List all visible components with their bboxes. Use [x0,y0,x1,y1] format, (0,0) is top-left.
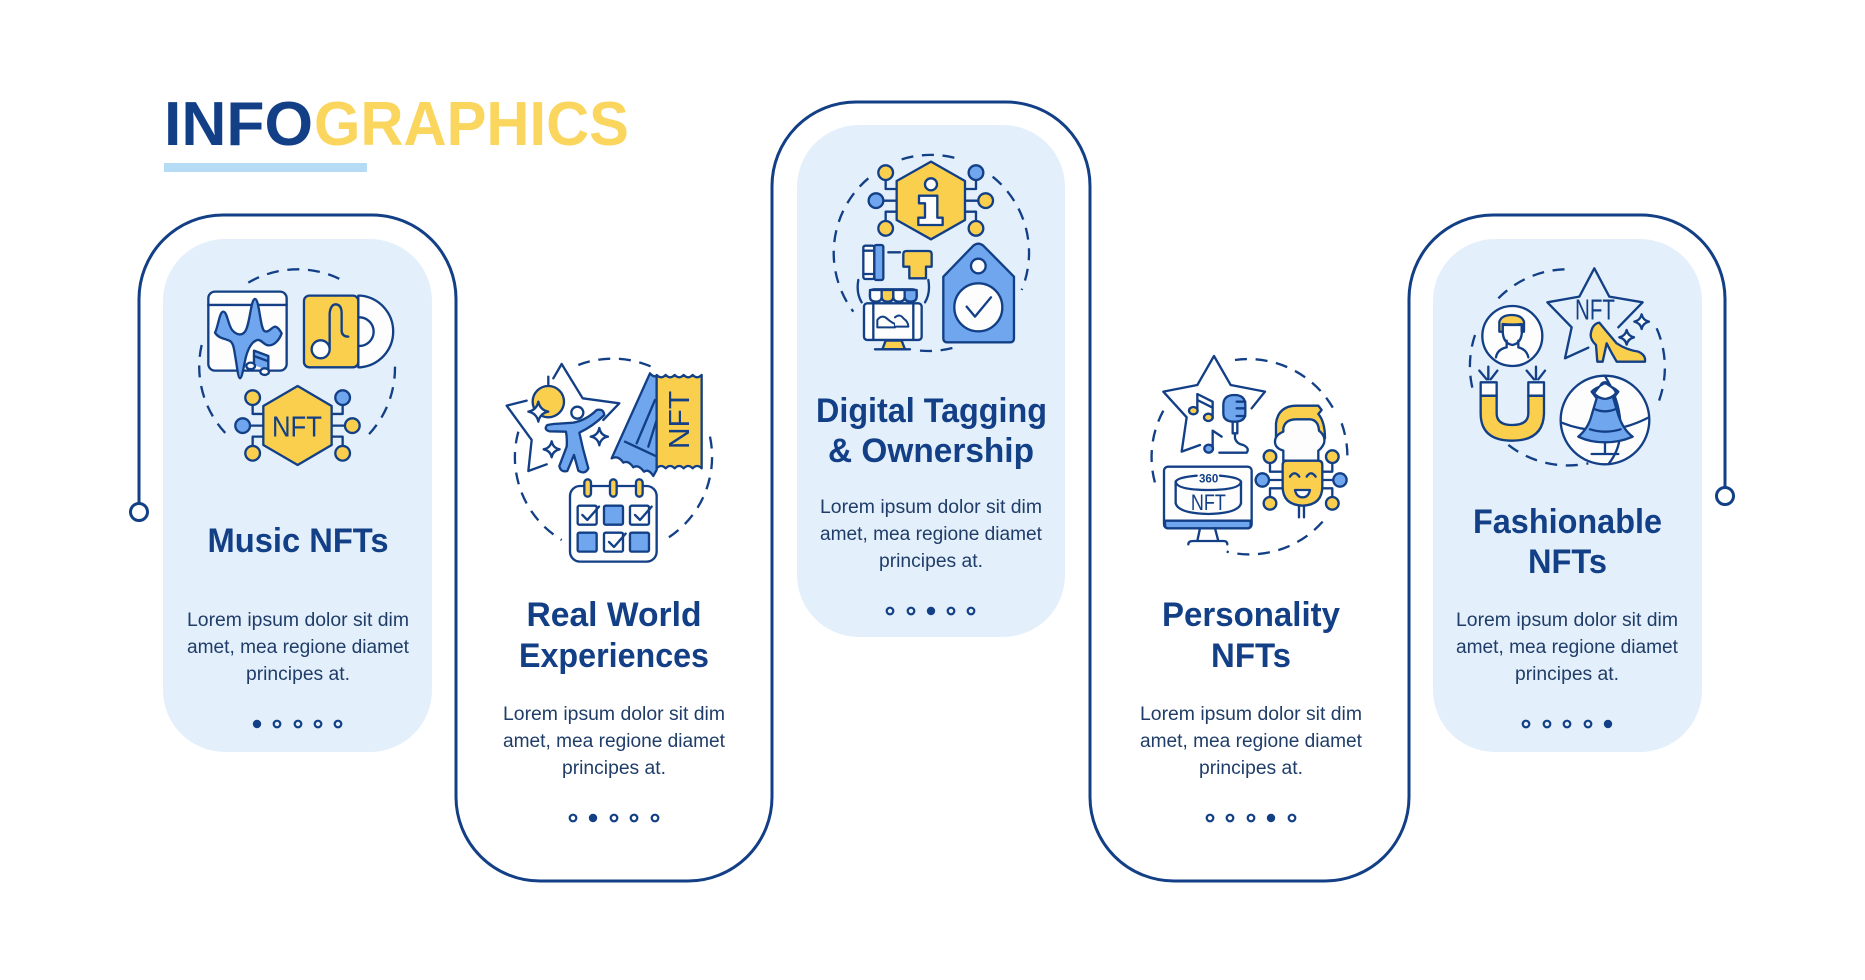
heading: Personality [1162,596,1340,634]
panel: fashionable NFTs [1456,268,1679,728]
light panel: fashionable [1433,239,1702,752]
heading [1473,503,1662,581]
description: principes at. [1199,758,1303,779]
description [503,704,726,779]
panel: music NFTs [187,269,410,728]
icon: fashionable NFT: NFT [1575,294,1615,326]
title: INFO [164,90,313,159]
icon: personality NFT [1152,356,1347,554]
icon: personality NFT: NFT [1191,490,1226,515]
icon: fashionable NFT [1470,268,1665,465]
description: principes at. [246,664,350,685]
description: Lorem ipsum dolor sit dim [1140,704,1362,725]
heading: Experiences [519,637,709,675]
description: Lorem ipsum dolor sit dim [187,610,409,631]
description [1140,704,1363,779]
panel: real world experiences [503,359,726,822]
description: amet, mea regione diamet [187,637,410,658]
heading: Music NFTs [208,522,388,560]
description: amet, mea regione diamet [820,524,1043,545]
description: Lorem ipsum dolor sit dim [1456,610,1678,631]
description: principes at. [1515,664,1619,685]
icon: real world experiences [507,359,712,562]
description: amet, mea regione diamet [1456,637,1679,658]
title: GRAPHICS [314,90,629,159]
description: Lorem ipsum dolor sit dim [820,497,1042,518]
heading: Real World [526,596,702,634]
icon: real world experiences: NFT [664,391,696,449]
heading [519,596,709,675]
continuous outline connector [130,102,1734,881]
heading: NFTs [1211,637,1291,675]
heading: NFTs [1528,543,1607,581]
description [1456,610,1679,685]
pagination dots [1207,814,1295,822]
description: Lorem ipsum dolor sit dim [503,704,725,725]
heading [816,392,1047,470]
pagination dots [253,720,341,728]
icon: music NFT [199,269,395,465]
description: principes at. [562,758,666,779]
pagination dots [1523,720,1612,728]
description: amet, mea regione diamet [1140,731,1363,752]
panel: digital tagging and ownership [816,155,1047,615]
light panel: music [163,239,432,752]
light panel: digital tagging [797,125,1065,637]
heading: Digital Tagging [816,392,1047,430]
title [164,90,629,159]
icon: digital tagging [834,155,1029,351]
description [820,497,1043,572]
description: amet, mea regione diamet [503,731,726,752]
pagination dots [570,814,658,822]
pagination dots [887,607,974,615]
heading: & Ownership [828,432,1034,470]
heading [1162,596,1340,675]
description [187,610,410,685]
panel: personality NFTs [1140,356,1363,822]
icon: music NFT: NFT [272,412,322,444]
description: principes at. [879,551,983,572]
icon: personality NFT: 360 [1199,471,1219,485]
title underline [164,163,367,172]
heading: Fashionable [1473,503,1662,541]
